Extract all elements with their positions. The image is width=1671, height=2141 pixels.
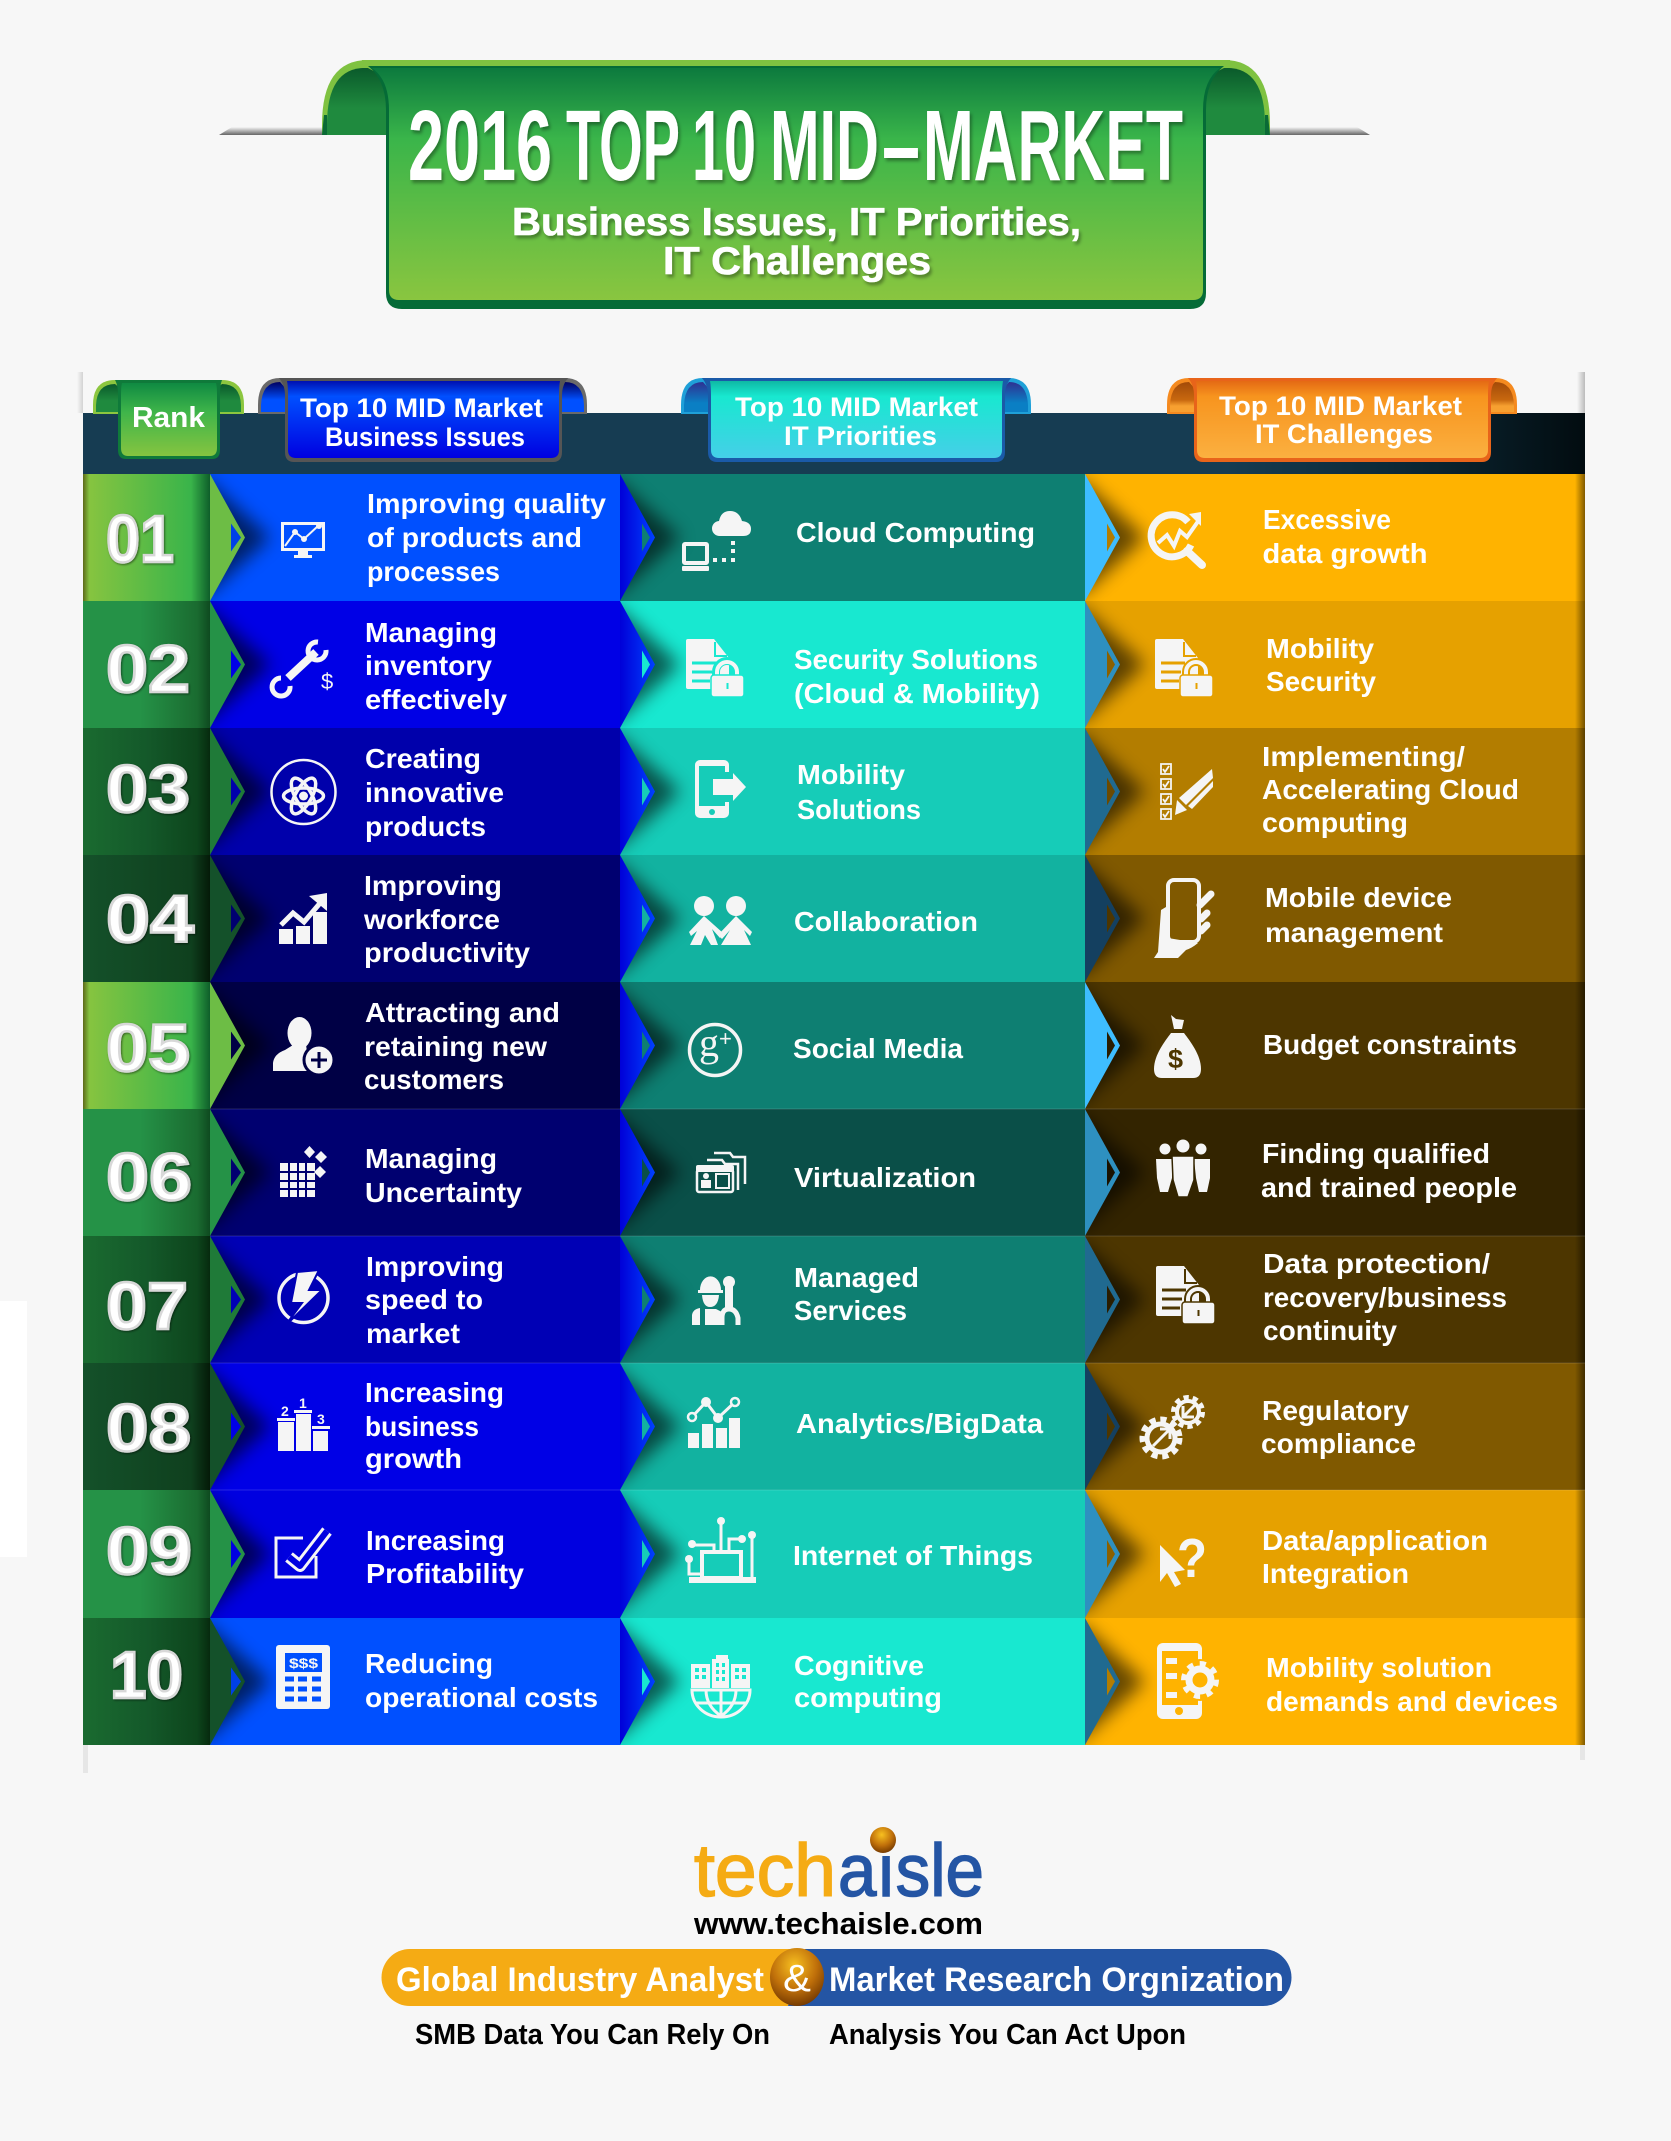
icon: three people — [1156, 1140, 1210, 1197]
panel: business issue 07 — [200, 1236, 620, 1363]
icon: hand holding phone — [1154, 880, 1211, 958]
rank numbers — [106, 502, 194, 1713]
text: computing — [1262, 807, 1408, 838]
text — [1262, 1525, 1488, 1589]
icon: money bag — [1154, 1015, 1201, 1078]
text — [1265, 882, 1452, 948]
header ribbon: IT challenges: IT Challenges — [1255, 419, 1433, 449]
icon: compliance gears — [1143, 1398, 1202, 1456]
text: market — [366, 1318, 460, 1349]
icon: user plus — [273, 1017, 334, 1075]
text — [364, 997, 560, 1095]
panel: business issue 02 — [200, 601, 620, 728]
text — [794, 1650, 942, 1713]
text: customers — [364, 1064, 504, 1095]
text — [365, 1251, 504, 1349]
header ribbon: IT priorities: IT Priorities — [784, 421, 937, 451]
icon: podium: 3 — [317, 1411, 325, 1427]
text — [1263, 1248, 1507, 1346]
panel: business issue 08 — [200, 1363, 620, 1490]
icon: checklist and pen — [1161, 764, 1213, 819]
panel: IT challenge 05 — [1075, 982, 1585, 1109]
text: of products and — [367, 522, 582, 553]
icon: podium: 1 — [299, 1395, 307, 1411]
panel: rank column — [83, 474, 210, 1745]
text: Mobility — [1266, 633, 1375, 664]
panel: IT challenge 01 — [1075, 474, 1585, 601]
header ribbon: IT challenges: Top 10 MID Market — [1219, 391, 1462, 421]
text — [1262, 741, 1519, 838]
icon: cursor and question mark: ? — [1177, 1527, 1207, 1589]
title ribbon — [219, 60, 1370, 309]
text: Mobile device — [1265, 882, 1452, 913]
text: and trained people — [1261, 1172, 1517, 1203]
text: Reducing — [365, 1648, 493, 1679]
ampersand sphere: & — [783, 1958, 811, 2000]
panel: IT priority 01 — [610, 474, 1085, 601]
icon: worker with wrench — [692, 1276, 738, 1325]
text: Managed — [794, 1262, 919, 1293]
text: Finding qualified — [1262, 1138, 1490, 1169]
text: growth — [365, 1443, 462, 1474]
text: Social Media — [793, 1033, 964, 1064]
icon: internet of things — [685, 1517, 756, 1583]
icon: money bag: $ — [1168, 1044, 1183, 1074]
text: Excessive — [1263, 504, 1391, 535]
text: recovery/business — [1263, 1282, 1507, 1313]
rank numbers: 08 — [106, 1391, 191, 1466]
title heading: – — [882, 90, 920, 202]
panel: IT challenge 02 — [1075, 601, 1585, 728]
text: Budget constraints — [1263, 1029, 1517, 1060]
text: Increasing — [366, 1525, 505, 1556]
panel: IT challenge 08 — [1075, 1363, 1585, 1490]
text: management — [1265, 917, 1443, 948]
panel: IT priority 10 — [610, 1618, 1085, 1745]
logo: techaisle: aısle — [838, 1829, 984, 1912]
title heading: 2016 — [408, 90, 552, 202]
panel: business issue 10 — [200, 1618, 620, 1745]
icon: magnifier growth — [1151, 512, 1202, 565]
icon: cloud computer — [682, 511, 751, 571]
text: Regulatory — [1262, 1395, 1410, 1426]
icon: people holding hands — [689, 896, 752, 945]
icon: google plus: + — [719, 1026, 732, 1051]
rank numbers: 10 — [110, 1638, 183, 1713]
icon: google plus: g — [699, 1020, 719, 1065]
text: speed to — [365, 1284, 483, 1315]
panel: IT priority 09 — [610, 1490, 1085, 1618]
text: Services — [794, 1295, 907, 1326]
icon: cursor and question mark — [1160, 1527, 1207, 1589]
panel: IT priority 07 — [610, 1236, 1085, 1363]
text — [367, 488, 607, 587]
panel: business issue 05 — [200, 982, 620, 1109]
panel: business issue 03 — [200, 728, 620, 855]
text — [366, 1525, 525, 1589]
text: Increasing — [365, 1377, 504, 1408]
title heading — [408, 90, 1183, 202]
text: Data/application — [1262, 1525, 1488, 1556]
text — [1262, 504, 1428, 569]
text: Mobility solution — [1266, 1652, 1492, 1683]
text: Solutions — [797, 794, 921, 825]
text: Internet of Things — [793, 1540, 1033, 1571]
text: compliance — [1261, 1428, 1416, 1459]
text: Improving — [364, 870, 502, 901]
icon: wrench and dollar: $ — [321, 669, 333, 694]
panel: business issue 04 — [200, 855, 620, 982]
icon: globe and buildings — [691, 1655, 750, 1717]
panel: IT challenge 04 — [1075, 855, 1585, 982]
text: Improving quality — [367, 488, 607, 519]
tagline pill: Market Research Orgnization — [829, 1961, 1284, 1999]
text: Managing — [365, 1143, 497, 1174]
title subheading — [512, 201, 1081, 283]
text: Managing — [365, 617, 497, 648]
slogan right: Analysis You Can Act Upon — [829, 2019, 1186, 2051]
header ribbon: IT priorities: Top 10 MID Market — [735, 392, 978, 422]
icon: atom — [272, 760, 336, 824]
rank numbers: 07 — [106, 1269, 188, 1344]
rank numbers: 06 — [106, 1140, 192, 1215]
text — [363, 870, 531, 968]
icon: cubes — [280, 1146, 327, 1197]
title subheading: Business Issues, IT Priorities, — [512, 201, 1081, 244]
text: retaining new — [364, 1031, 548, 1062]
rank numbers: 05 — [106, 1011, 190, 1086]
panel: IT challenge 03 — [1075, 728, 1585, 855]
panel: IT challenge 06 — [1075, 1109, 1585, 1236]
icon: check box — [276, 1531, 327, 1577]
logo: techaisle: tech — [694, 1829, 836, 1912]
title heading: 10 — [692, 90, 756, 202]
header ribbon: business issues — [258, 378, 587, 462]
text: Collaboration — [794, 906, 978, 937]
tagline pill: Global Industry Analyst — [396, 1961, 764, 1999]
text: effectively — [365, 684, 508, 715]
text: Uncertainty — [365, 1177, 523, 1208]
ampersand sphere — [770, 1948, 824, 2006]
text: workforce — [363, 904, 500, 935]
slogan left: SMB Data You Can Rely On — [415, 2019, 770, 2051]
text: Implementing/ — [1262, 741, 1465, 772]
text: Cloud Computing — [796, 517, 1035, 548]
text: demands and devices — [1266, 1686, 1558, 1717]
text — [1261, 1395, 1416, 1459]
text: computing — [794, 1682, 942, 1713]
header ribbon: IT priorities — [681, 378, 1031, 462]
text: innovative — [365, 777, 504, 808]
text — [365, 617, 508, 715]
icon: document lock — [1155, 639, 1213, 697]
text — [1261, 1138, 1517, 1203]
text: Analytics/BigData — [796, 1408, 1044, 1439]
text: Improving — [366, 1251, 504, 1282]
panel: IT priority 02 — [610, 601, 1085, 728]
panel: IT priority 06 — [610, 1109, 1085, 1236]
text: Virtualization — [794, 1162, 976, 1193]
icon: rising bars — [279, 893, 327, 944]
website: www.techaisle.com — [693, 1906, 983, 1941]
panel: business issue 06 — [200, 1109, 620, 1236]
rank numbers: 09 — [106, 1514, 192, 1589]
text: productivity — [364, 937, 531, 968]
icon: podium: 2 — [281, 1403, 289, 1419]
icon: analytics chart — [688, 1397, 740, 1448]
text — [1266, 1652, 1558, 1717]
logo: techaisle — [694, 1827, 984, 1912]
text: Mobility — [797, 759, 906, 790]
text: business — [365, 1411, 479, 1442]
text — [797, 759, 921, 825]
logo sphere — [870, 1827, 896, 1853]
header ribbon: business issues: Business Issues — [325, 422, 525, 452]
panel: IT priority 03 — [610, 728, 1085, 855]
header ribbon: rank — [93, 380, 244, 459]
title heading: MARKET — [923, 90, 1183, 202]
header ribbon: IT challenges — [1167, 378, 1517, 462]
icon: document lock — [1156, 1266, 1215, 1324]
header ribbon: rank: Rank — [132, 402, 206, 434]
rank numbers: 02 — [106, 632, 190, 707]
text — [794, 1262, 919, 1326]
header ribbon: business issues: Top 10 MID Market — [300, 393, 543, 423]
panel: business issue 01 — [200, 474, 620, 601]
text — [365, 1377, 504, 1474]
text: Creating — [365, 743, 481, 774]
panel: IT priority 05 — [610, 982, 1085, 1109]
text — [365, 1648, 598, 1713]
title heading: MID — [770, 90, 879, 202]
icon: wrench and dollar — [272, 642, 333, 696]
text: processes — [367, 556, 500, 587]
text: Profitability — [366, 1558, 525, 1589]
icon: calculator — [276, 1645, 330, 1709]
icon: document lock — [686, 639, 744, 697]
text — [365, 1143, 523, 1208]
panel: IT challenge 07 — [1075, 1236, 1585, 1363]
icon: virtual folders — [696, 1153, 745, 1192]
panel: IT priority 04 — [610, 855, 1085, 982]
panel: business issue 09 — [200, 1490, 620, 1618]
icon: phone arrow — [695, 760, 746, 818]
text: products — [365, 811, 486, 842]
icon: google plus — [690, 1020, 740, 1076]
text: continuity — [1263, 1315, 1398, 1346]
text: data growth — [1262, 538, 1428, 569]
text: (Cloud & Mobility) — [794, 678, 1040, 709]
rank numbers: 04 — [106, 882, 194, 957]
text: Data protection/ — [1263, 1248, 1490, 1279]
icon: calculator: $$$ — [289, 1655, 318, 1671]
rank numbers: 03 — [106, 752, 190, 827]
rank numbers: 01 — [106, 502, 174, 577]
panel: IT challenge 10 — [1075, 1618, 1585, 1745]
text: Security Solutions — [794, 644, 1038, 675]
text: Security — [1266, 666, 1377, 697]
icon: phone and gear — [1157, 1643, 1221, 1719]
text — [365, 743, 504, 842]
header band — [77, 372, 1591, 474]
text: operational costs — [365, 1682, 598, 1713]
text — [794, 644, 1040, 709]
text: Accelerating Cloud — [1262, 774, 1519, 805]
panel: IT priority 08 — [610, 1363, 1085, 1490]
icon: podium — [277, 1395, 330, 1451]
text: Cognitive — [794, 1650, 924, 1681]
icon: monitor chart — [282, 523, 324, 558]
icon: lightning circle — [279, 1270, 328, 1326]
tagline pill — [382, 1948, 1292, 2006]
text: inventory — [365, 650, 493, 681]
panel: IT challenge 09 — [1075, 1490, 1585, 1618]
text: Attracting and — [365, 997, 560, 1028]
title subheading: IT Challenges — [663, 240, 931, 283]
text — [1266, 633, 1377, 697]
text: Integration — [1262, 1558, 1409, 1589]
title heading: TOP — [566, 90, 680, 202]
